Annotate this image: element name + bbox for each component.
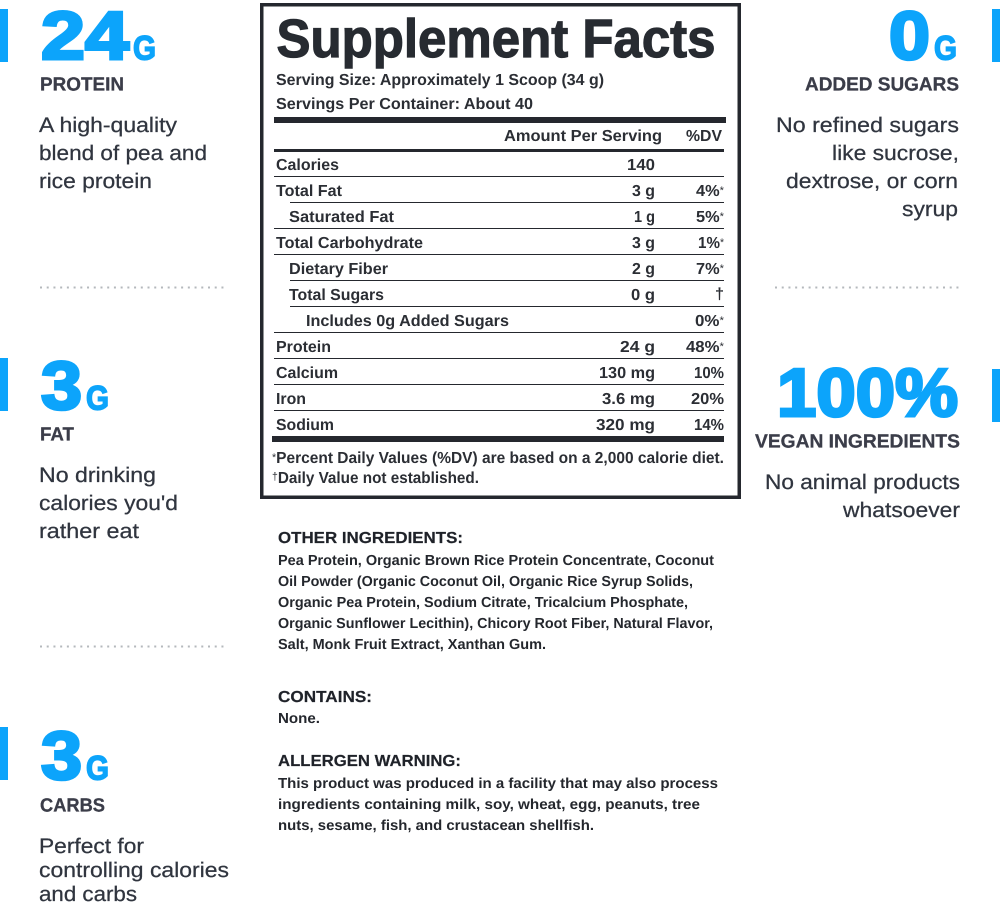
table rows: nutrients: 24 g — [620, 339, 655, 356]
text: added sugars description: like sucrose, — [832, 142, 959, 165]
text: added sugars description: No refined sugars — [776, 114, 959, 137]
text: carbs description: controlling calories — [39, 859, 229, 882]
table rows: nutrients: Iron — [276, 391, 306, 408]
text block: contains — [278, 689, 372, 727]
text: fat description: No drinking — [39, 464, 156, 487]
table rows: nutrients: 140 — [627, 157, 655, 174]
text: serving info: Servings Per Container: About 40 — [276, 96, 533, 113]
table rows: nutrients: Protein — [276, 339, 331, 356]
text: carbs description — [39, 835, 229, 903]
text: fat description: rather eat — [39, 520, 139, 543]
accent bar: vegan — [992, 369, 1000, 422]
table rows: nutrients: * — [719, 315, 725, 327]
text: serving info: Serving Size: Approximately 1 Scoop (34 g) — [276, 72, 604, 89]
panel: carbs stat — [0, 718, 229, 903]
table rows: nutrients: † — [715, 286, 724, 303]
text: footnotes: † — [272, 471, 278, 483]
text: added sugars description: dextrose, or corn — [786, 170, 958, 193]
number: 24g — [41, 0, 156, 74]
text: protein description: A high-quality — [39, 114, 178, 137]
number: 3g fat: G — [86, 380, 109, 418]
table rows: nutrients: Dietary Fiber — [289, 261, 388, 278]
table rows: nutrients: 10% — [694, 365, 724, 382]
table rows: nutrients: 5% — [696, 209, 719, 226]
panel: vegan stat — [755, 355, 1000, 522]
text: added sugars description: syrup — [902, 198, 958, 221]
label: fat: FAT — [40, 424, 74, 446]
table rows: nutrients: Total Carbohydrate — [276, 235, 423, 252]
table rows: nutrients: 7% — [696, 261, 719, 278]
table rows: nutrients: * — [720, 263, 725, 275]
table rows: nutrients: 4% — [696, 183, 719, 200]
number: 3g fat: 3 — [41, 348, 82, 424]
table header: Amount Per Serving — [504, 128, 662, 145]
label: protein: PROTEIN — [40, 74, 124, 96]
text block: allergen warning: This product was produced in a facility that may also process — [278, 776, 718, 792]
text block: other ingredients: Organic Sunflower Lecithin), Chicory Root Fiber, Natural Flavor, — [278, 616, 713, 632]
text: vegan description: whatsoever — [842, 499, 960, 522]
table rows: nutrients: 130 mg — [599, 365, 655, 382]
text: protein description — [39, 114, 207, 193]
number: 0g: G — [934, 30, 957, 68]
text block: other ingredients: OTHER INGREDIENTS: — [278, 530, 463, 547]
text: footnotes: Daily Value not established. — [278, 470, 479, 487]
text block: allergen warning: ALLERGEN WARNING: — [278, 753, 461, 770]
heading: supplement facts: Supplement Facts — [276, 9, 716, 69]
number: 24g: G — [133, 30, 156, 68]
number: 0g — [889, 0, 957, 74]
number: 24g: 24 — [41, 0, 129, 74]
table rows: nutrients: 20% — [691, 391, 724, 408]
table rows: nutrients: 1% — [698, 235, 721, 252]
table rows: nutrients: 320 mg — [596, 417, 655, 434]
table rows: nutrients: * — [720, 237, 725, 249]
text block: allergen warning: ingredients containing milk, soy, wheat, egg, peanuts, tree — [278, 797, 700, 813]
panel: protein stat — [0, 0, 207, 193]
panel: added sugars stat — [776, 0, 1000, 221]
table rows: nutrients: Total Sugars — [289, 287, 384, 304]
accent bar: added sugars — [992, 9, 1000, 62]
text block: contains: None. — [278, 711, 320, 727]
accent bar: fat — [0, 358, 8, 411]
table rows: nutrients: 48% — [686, 339, 718, 356]
text: added sugars description — [776, 114, 959, 221]
number: 3g carbs — [41, 718, 109, 794]
table rows: nutrients: * — [720, 341, 725, 353]
table rows: nutrients: * — [720, 211, 725, 223]
text: protein description: rice protein — [39, 170, 152, 193]
table rows: nutrients: 1 g — [634, 209, 655, 226]
text: footnotes: * — [272, 452, 277, 464]
text: footnotes — [272, 450, 724, 487]
text: fat description: calories you'd — [39, 492, 178, 515]
text block: other ingredients: Oil Powder (Organic Coconut Oil, Organic Rice Syrup Solids, — [278, 574, 693, 590]
text block: other ingredients: Pea Protein, Organic Brown Rice Protein Concentrate, Coconut — [278, 553, 714, 569]
text block: allergen warning: nuts, sesame, fish, and crustacean shellfish. — [278, 818, 594, 834]
number: 3g carbs: 3 — [41, 718, 82, 794]
panel: supplement facts label — [262, 5, 739, 497]
text: protein description: blend of pea and — [39, 142, 207, 165]
text block: other ingredients: Organic Pea Protein, Sodium Citrate, Tricalcium Phosphate, — [278, 595, 688, 611]
table rows: nutrients: 0 g — [631, 287, 655, 304]
text: vegan description — [765, 471, 960, 522]
text block: other ingredients — [278, 530, 714, 653]
number: 0g: 0 — [889, 0, 930, 74]
number: 3g carbs: G — [86, 750, 109, 788]
text: fat description — [39, 464, 178, 543]
table rows: nutrients: Calories — [276, 157, 339, 174]
table rows: nutrients: Total Fat — [276, 183, 343, 200]
accent bar: carbs — [0, 727, 8, 780]
text: carbs description: Perfect for — [39, 835, 144, 858]
table rows: nutrients: 2 g — [632, 261, 655, 278]
text: serving info — [276, 72, 604, 113]
table rows: nutrients: Calcium — [276, 365, 338, 382]
table rows: nutrients: * — [720, 185, 725, 197]
number: 100%: 100% — [777, 355, 958, 431]
table rows: nutrients: 14% — [694, 417, 724, 434]
table header: %DV — [686, 128, 722, 145]
panel: fat stat — [0, 348, 178, 543]
label: carbs: CARBS — [40, 796, 105, 816]
table rows: nutrients: 0% — [695, 313, 718, 330]
text: vegan description: No animal products — [765, 471, 960, 494]
number: 3g fat — [41, 348, 109, 424]
table rows: nutrients: Saturated Fat — [289, 209, 395, 226]
text: footnotes: Percent Daily Values (%DV) are based on a 2,000 calorie diet. — [276, 450, 724, 467]
table rows: nutrients: 3.6 mg — [602, 391, 655, 408]
text block: other ingredients: Salt, Monk Fruit Extract, Xanthan Gum. — [278, 637, 546, 653]
table rows: nutrients: 3 g — [632, 235, 655, 252]
text block: allergen warning — [278, 753, 718, 834]
table rows: nutrients: 3 g — [632, 183, 655, 200]
table rows: nutrients: Sodium — [276, 417, 334, 434]
accent bar: protein — [0, 9, 8, 62]
label: added sugars: ADDED SUGARS — [805, 74, 959, 96]
label: vegan ingredients: VEGAN INGREDIENTS — [755, 432, 960, 452]
table rows: nutrients — [274, 157, 725, 434]
text block: contains: CONTAINS: — [278, 689, 372, 706]
table rows: nutrients: Includes 0g Added Sugars — [306, 313, 509, 330]
panel border — [262, 5, 739, 497]
